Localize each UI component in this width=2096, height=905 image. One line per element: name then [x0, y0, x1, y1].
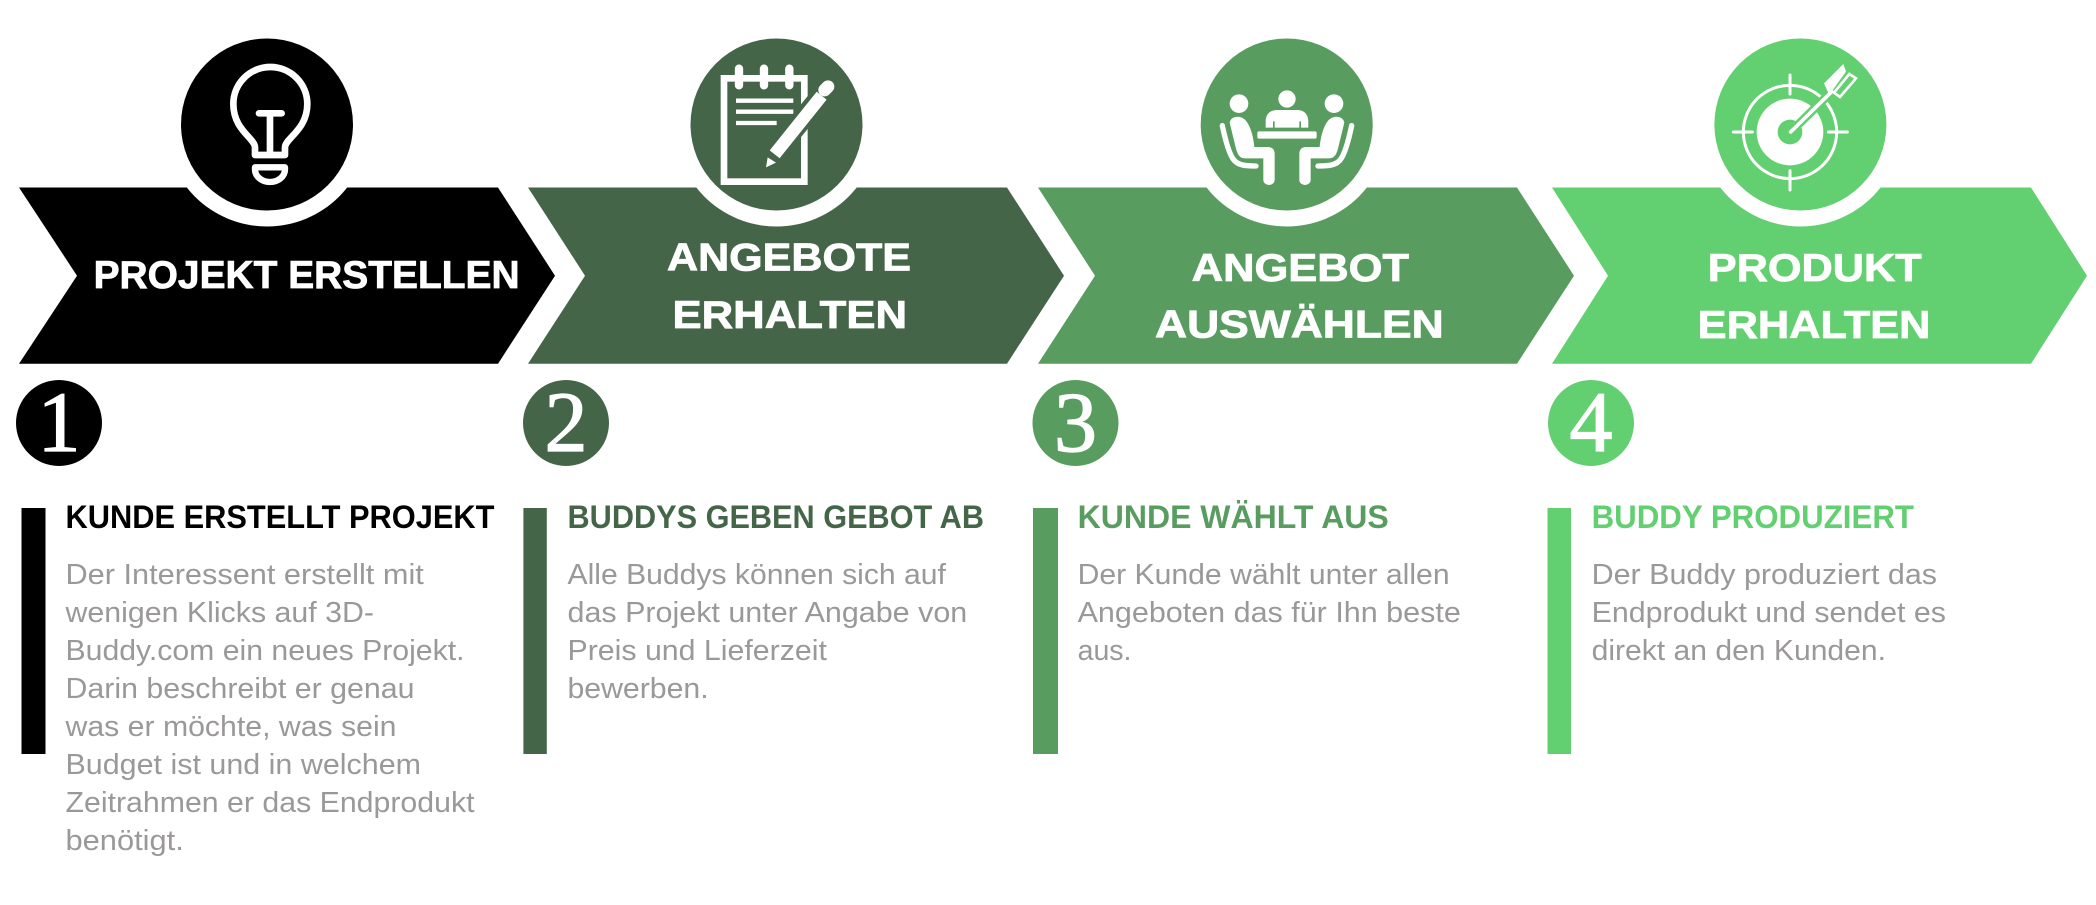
- badge: number 3: 3: [1054, 374, 1097, 470]
- panel: step 2 description: [523, 499, 984, 754]
- panel: step 2 description: das Projekt unter Angabe von: [568, 597, 967, 629]
- heading: Angebot auswählen: AUSWÄHLEN: [1155, 304, 1444, 347]
- panel: step 1 banner: [19, 22, 555, 364]
- heading: Produkt erhalten: PRODUKT: [1708, 247, 1922, 290]
- badge: number 4: [1548, 374, 1634, 470]
- panel: step 2 banner: [528, 22, 1064, 364]
- heading: Angebote erhalten: [667, 236, 911, 337]
- panel: step 3 description: [1033, 499, 1461, 754]
- panel: step 1 description: KUNDE ERSTELLT PROJEKT: [66, 499, 495, 535]
- panel: step 1 description: Buddy.com ein neues Projekt.: [66, 635, 464, 667]
- panel: step 1 description: [22, 499, 495, 857]
- panel: step 4 description: Endprodukt und sendet es: [1592, 597, 1946, 629]
- heading: Produkt erhalten: ERHALTEN: [1698, 304, 1930, 347]
- panel: step 1 description: Der Interessent erstellt mit: [66, 559, 424, 591]
- panel: step 1 description: benötigt.: [66, 825, 184, 857]
- panel: step 1 description: was er möchte, was sein: [64, 711, 397, 743]
- heading: Angebot auswählen: ANGEBOT: [1192, 247, 1410, 290]
- badge: number 2: 2: [544, 374, 588, 470]
- panel: step 2 description: Alle Buddys können sich auf: [568, 559, 947, 591]
- heading: Produkt erhalten: [1698, 247, 1930, 347]
- panel: step 4 description: direkt an den Kunden.: [1592, 635, 1886, 667]
- heading: Angebote erhalten: ERHALTEN: [672, 294, 907, 337]
- panel: step 3 description: KUNDE WÄHLT AUS: [1078, 499, 1389, 535]
- panel: step 2 description: bewerben.: [568, 673, 709, 705]
- panel: step 3 description: Der Kunde wählt unter allen: [1078, 559, 1450, 591]
- icon: notepad and pencil: [724, 69, 828, 182]
- badge: number 1: [16, 374, 102, 470]
- icon: target with arrow: [1733, 64, 1856, 190]
- panel: step 4 description: BUDDY PRODUZIERT: [1592, 499, 1914, 535]
- panel: step 3 banner: [1038, 22, 1574, 364]
- heading: Angebot auswählen: [1155, 247, 1444, 347]
- badge: number 1: 1: [38, 374, 80, 470]
- panel: step 4 banner: [1552, 22, 2087, 364]
- badge: number 3: [1032, 374, 1118, 470]
- icon: light bulb: [233, 67, 307, 182]
- heading: Projekt erstellen: PROJEKT ERSTELLEN: [94, 254, 520, 297]
- panel: step 2 description: Preis und Lieferzeit: [568, 635, 827, 667]
- badge: number 4: 4: [1570, 374, 1612, 470]
- panel: step 4 description: Der Buddy produziert das: [1592, 559, 1937, 591]
- badge: number 2: [523, 374, 609, 470]
- panel: step 4 description: [1548, 499, 1946, 754]
- panel: step 1 description: Darin beschreibt er genau: [66, 673, 414, 705]
- panel: step 2 description: BUDDYS GEBEN GEBOT AB: [568, 499, 984, 535]
- heading: Angebote erhalten: ANGEBOTE: [667, 236, 911, 280]
- panel: step 1 description: wenigen Klicks auf 3D-: [64, 597, 374, 629]
- panel: step 3 description: aus.: [1078, 635, 1132, 667]
- panel: step 3 description: Angeboten das für Ihn beste: [1078, 597, 1461, 629]
- icon: meeting at table: [1222, 90, 1352, 185]
- panel: step 1 description: Zeitrahmen er das Endprodukt: [66, 787, 474, 819]
- panel: step 1 description: Budget ist und in welchem: [66, 749, 421, 781]
